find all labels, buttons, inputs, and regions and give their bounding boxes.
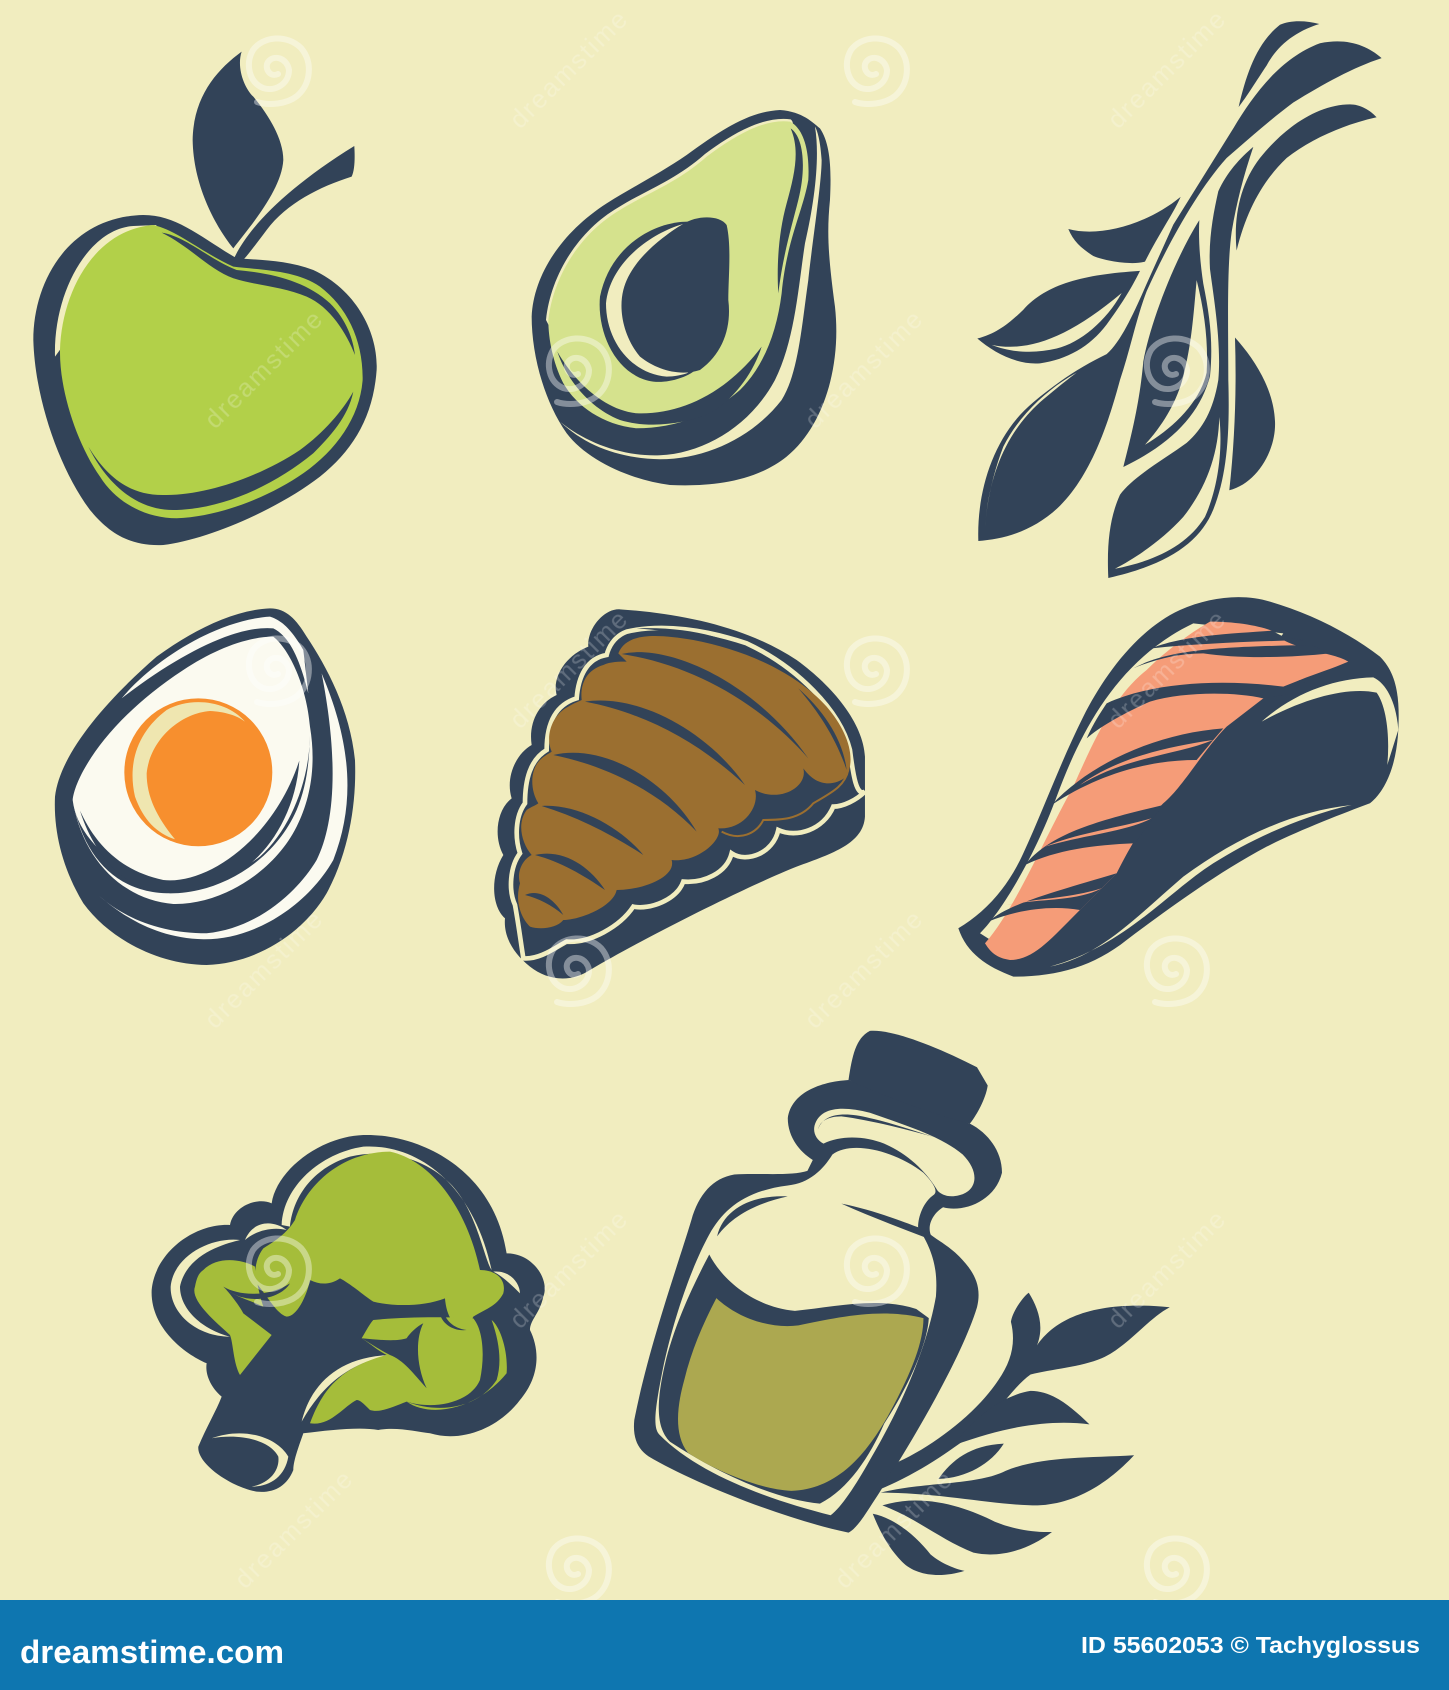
footer bar (0, 1600, 1449, 1690)
watermarks: dreamstime (228, 1463, 359, 1594)
watermarks: dreamstime (1101, 603, 1232, 734)
watermarks: dreamstime (798, 303, 929, 434)
sprig leaves (873, 1293, 1170, 1575)
watermarks: dreamstime (503, 603, 634, 734)
footer credit: ID 55602053 © Tachyglossus (1081, 1632, 1420, 1658)
collar highlight (814, 1109, 974, 1196)
icon: broccoli (152, 1135, 545, 1492)
watermarks: dreamstime (503, 3, 634, 134)
footer logo: dreamstime.com (20, 1634, 284, 1670)
watermarks: dreamstime (198, 303, 329, 434)
icon: croissant (494, 609, 865, 978)
watermarks: dreamstime (798, 903, 929, 1034)
cork (848, 1031, 988, 1124)
watermarks: dreamstime (503, 1203, 634, 1334)
watermarks: dreamstime (198, 903, 329, 1034)
icon: olive oil bottle (634, 1031, 1170, 1575)
watermarks: dreamstime (1101, 1203, 1232, 1334)
icon: boiled egg (55, 608, 355, 965)
bottle body (634, 1080, 1002, 1533)
inner dark shade (659, 1255, 929, 1504)
watermarks: dreamstime (1101, 3, 1232, 134)
watermarks: dreamstime (828, 1463, 959, 1594)
icon: apple (33, 52, 377, 545)
icon: olive branch (977, 21, 1382, 578)
icon: salmon steak (958, 597, 1399, 977)
icon: avocado (532, 110, 836, 485)
watermarks (198, 3, 1232, 1604)
oil liquid (678, 1298, 923, 1491)
